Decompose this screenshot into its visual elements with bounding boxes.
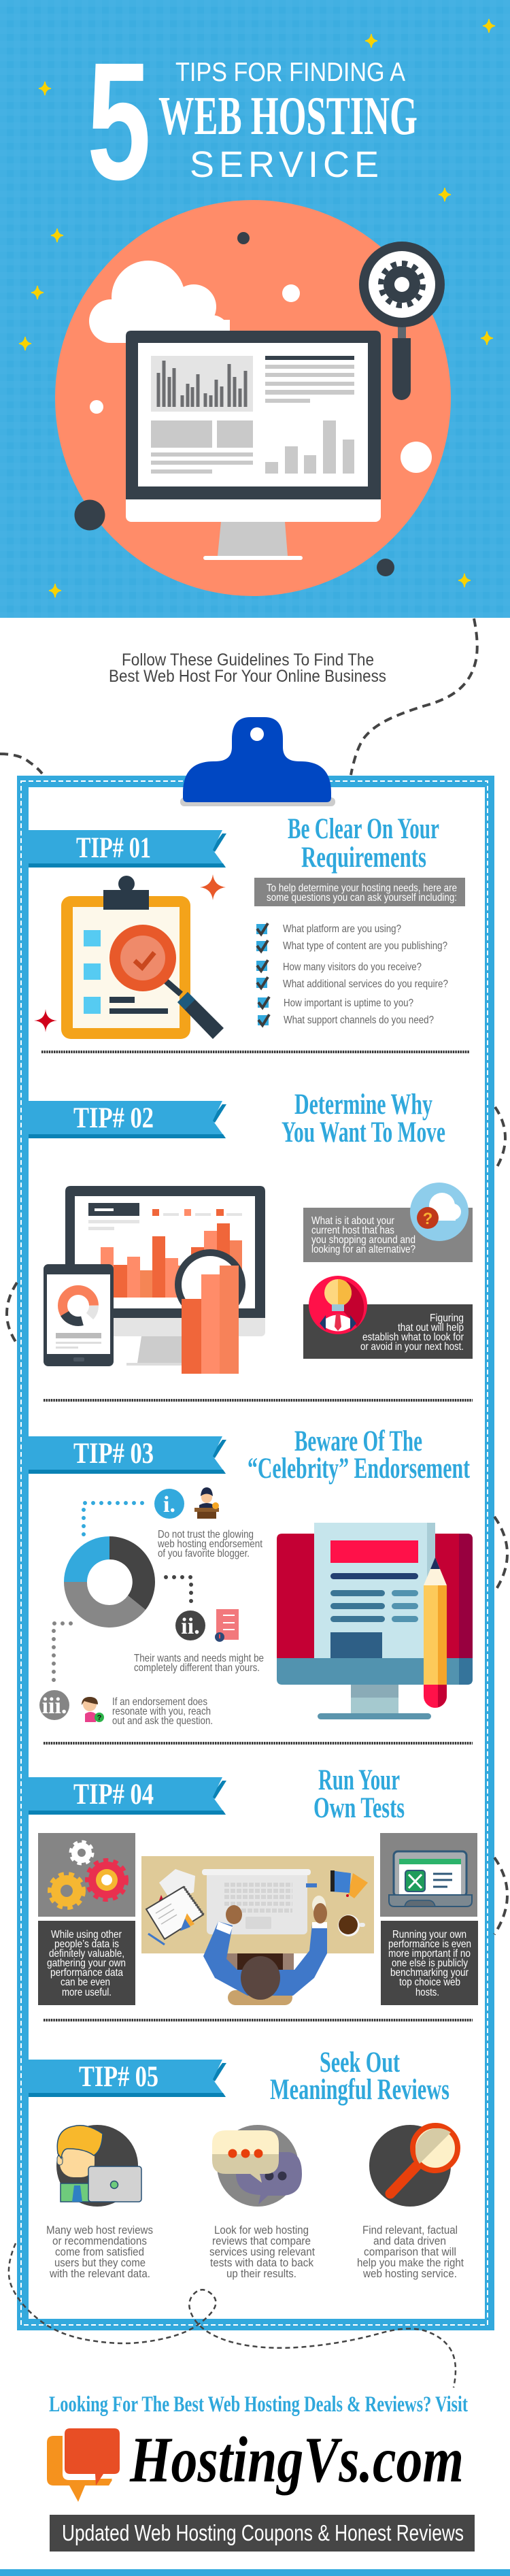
heading: tip 01: Be Clear On Your	[288, 813, 439, 845]
donut chart	[64, 1536, 155, 1628]
heading: tip 04: Own Tests	[313, 1792, 405, 1824]
step i	[154, 1487, 262, 1559]
callout: figuring	[303, 1276, 473, 1359]
heading: tip 03: Beware Of The	[294, 1425, 422, 1457]
text: review column 1: or recommendations	[52, 2234, 147, 2247]
dotted connectors	[54, 1503, 191, 1682]
text: review column 3	[357, 2224, 464, 2280]
step i: Do not trust the glowing	[158, 1529, 254, 1540]
panel: clipboard frame	[17, 776, 494, 2330]
callout: tip 04 left text: performance data	[50, 1967, 123, 1979]
title line 1: TIPS FOR FINDING A	[175, 58, 405, 87]
callout: question	[303, 1183, 473, 1262]
callout: tip 04 right text: more important if no	[388, 1948, 471, 1960]
illustration: monitor with document and pencil	[277, 1523, 473, 1719]
checklist: What additional services do you require?	[283, 978, 448, 990]
callout: question: you shopping around and	[311, 1234, 415, 1246]
ribbon: tip 04: TIP# 04	[73, 1779, 154, 1811]
callout: tip 04 right text: benchmarking your	[390, 1967, 469, 1979]
title numeral: 5	[87, 28, 151, 215]
callout: tip 04 left text: can be even	[61, 1977, 110, 1988]
text: review column 3: and data driven	[373, 2234, 446, 2247]
cloud	[89, 261, 230, 352]
foreground bars	[182, 1266, 239, 1374]
text: review column 3: help you make the right	[357, 2256, 464, 2269]
text: review column 3: web hosting service.	[362, 2267, 457, 2280]
text: review column 2: up their results.	[226, 2267, 296, 2280]
heading: tip 05: Seek Out	[320, 2047, 400, 2079]
tablet	[44, 1264, 114, 1366]
dashed loop connector	[9, 2243, 456, 2388]
step iii: If an endorsement does	[112, 1696, 207, 1708]
heading: tip 01: Requirements	[301, 842, 426, 874]
person	[203, 1903, 327, 2000]
floating dots	[75, 232, 432, 576]
callout: tip 04 right text: Running your own	[392, 1929, 466, 1941]
step iii: out and ask the question.	[112, 1715, 213, 1727]
dashed connector top right	[351, 618, 477, 775]
title	[87, 28, 418, 215]
text: review column 2: services using relevant	[209, 2245, 315, 2258]
callout: figuring: Figuring	[430, 1312, 464, 1324]
magnifier ring	[178, 1253, 242, 1317]
callout: tip 04 left text	[38, 1921, 135, 2005]
callout: figuring: or avoid in your next host.	[360, 1341, 464, 1353]
intro text: Follow These Guidelines To Find The	[122, 650, 374, 670]
illustration: monitor, tablet and chart	[44, 1186, 265, 1374]
callout: tip 04 left text: people’s data is	[54, 1938, 119, 1950]
ribbon: tip 03: TIP# 03	[73, 1438, 154, 1470]
dashed connector top left	[0, 754, 42, 774]
tagline bar	[50, 2515, 475, 2552]
callout: question: looking for an alternative?	[311, 1244, 415, 1255]
icon: laptop spreadsheet tile	[380, 1833, 477, 1917]
text: review column 2: Look for web hosting	[214, 2224, 309, 2236]
books	[330, 1870, 368, 1898]
panel: tip 05	[29, 2047, 464, 2280]
callout: tip 04 left text: gathering your own	[47, 1958, 126, 1969]
step iii: iii.	[42, 1694, 67, 1719]
intro text	[109, 650, 386, 686]
checklist: How important is uptime to you?	[284, 997, 413, 1009]
checklist: What type of content are you publishing?	[283, 940, 447, 952]
checklist	[256, 923, 448, 1026]
ribbon: tip 05: TIP# 05	[79, 2061, 158, 2093]
text: review column 1	[46, 2224, 153, 2280]
callout: tip 04 right text: hosts.	[415, 1987, 439, 1998]
callout: figuring: establish what to look for	[362, 1332, 464, 1343]
icon: lightbulb person	[309, 1276, 367, 1334]
callout: tip 04 right text: one else is publicly	[392, 1958, 468, 1969]
ribbon: tip 02	[29, 1101, 226, 1138]
icon: speech bubbles	[47, 2428, 120, 2502]
icon: list with alert	[215, 1609, 239, 1642]
logo: HostingVs	[47, 2424, 464, 2502]
ribbon: tip 01: TIP# 01	[76, 832, 151, 864]
callout: tip 04 left text: definitely valuable,	[49, 1948, 124, 1960]
title line 3: SERVICE	[190, 144, 379, 185]
ribbon: tip 05	[29, 2060, 226, 2097]
text: review column 1: come from satisfied	[55, 2245, 144, 2258]
pencil	[424, 1557, 447, 1708]
icon: clipboard with magnifier	[34, 874, 226, 1039]
icon: person with question	[82, 1697, 104, 1722]
callout: tip 04 left text: While using other	[51, 1929, 122, 1941]
panel: header background	[0, 0, 510, 618]
text: review column 2	[209, 2224, 315, 2280]
footer band	[0, 2569, 510, 2576]
heading: tip 04	[313, 1764, 405, 1824]
ribbon: tip 04	[29, 1777, 226, 1815]
step i: web hosting endorsement	[157, 1538, 262, 1550]
heading: tip 05	[270, 2047, 449, 2106]
orange circle	[55, 200, 451, 596]
ribbon: tip 02: TIP# 02	[73, 1102, 154, 1134]
magnifier with gear	[359, 242, 445, 400]
step iii	[39, 1690, 213, 1727]
text: review column 2: tests with data to back	[210, 2256, 313, 2269]
callout: question: What is it about your	[311, 1215, 395, 1227]
step i: i.	[163, 1492, 175, 1517]
hero illustration	[55, 200, 451, 596]
callout: tip 01 intro	[254, 878, 465, 906]
clipboard clip	[180, 717, 335, 806]
callout: tip 04 right text	[381, 1921, 478, 2005]
callout: question: current host that has	[311, 1225, 394, 1236]
icon: magnifier	[369, 2125, 458, 2207]
step i: of you favorite blogger.	[158, 1548, 250, 1559]
illustration: person at desk	[141, 1856, 374, 2005]
monitor	[126, 331, 381, 560]
text: review column 1: with the relevant data.	[49, 2267, 150, 2280]
coffee and mouse	[312, 1896, 365, 1936]
text: review column 1: users but they come	[54, 2256, 146, 2269]
papers and notebook	[146, 1869, 203, 1945]
panel: tip 03	[29, 1425, 473, 1727]
step ii: ii.	[181, 1614, 200, 1639]
icon: gears tile	[38, 1833, 135, 1917]
checklist: What platform are you using?	[283, 923, 401, 935]
heading: tip 01	[288, 813, 439, 874]
text: review column 3: comparison that will	[364, 2245, 456, 2258]
text: review column 2: reviews that compare	[212, 2234, 311, 2247]
heading: tip 04: Run Your	[318, 1764, 400, 1796]
laptop	[202, 1869, 317, 1934]
panel: tip 01	[29, 813, 465, 1039]
icon: person with laptop	[56, 2125, 141, 2207]
callout: figuring: that out will help	[398, 1322, 464, 1334]
panel: tip 04	[29, 1764, 478, 2005]
callout: tip 04 left text: more useful.	[62, 1987, 112, 1998]
callout: tip 04 right text: performance is even	[388, 1938, 471, 1950]
step ii: Their wants and needs might be	[134, 1653, 264, 1664]
text: review column 1: Many web host reviews	[46, 2224, 153, 2236]
checklist: What support channels do you need?	[284, 1014, 434, 1026]
icon: cloud with question mark	[410, 1183, 469, 1241]
heading: tip 02: Determine Why	[294, 1089, 432, 1121]
icon: man at podium	[194, 1487, 219, 1519]
heading: tip 02	[282, 1089, 445, 1149]
intro text: Best Web Host For Your Online Business	[109, 667, 386, 686]
side dashed arcs	[7, 1107, 507, 1934]
callout: tip 04 right text: top choice web	[399, 1977, 460, 1988]
checklist: How many visitors do you receive?	[283, 961, 422, 973]
ribbon: tip 01	[29, 830, 226, 868]
callout: tip 01 intro: some questions you can ask yourself including:	[267, 892, 457, 904]
icon: person with question: ?	[97, 1714, 102, 1722]
decorative stars	[19, 19, 495, 597]
step ii	[134, 1609, 264, 1674]
step ii: completely different than yours.	[134, 1662, 260, 1674]
heading: tip 03	[248, 1425, 470, 1485]
icon: cloud with question mark: ?	[423, 1210, 432, 1228]
icon: chat bubbles	[212, 2125, 302, 2207]
panel: tip 02	[29, 1089, 473, 1374]
callout: tip 01 intro: To help determine your hosting needs, here are	[267, 882, 457, 894]
text: review column 3: Find relevant, factual	[362, 2224, 458, 2236]
step iii: resonate with you, reach	[112, 1706, 211, 1717]
ribbon: tip 03	[29, 1436, 226, 1474]
